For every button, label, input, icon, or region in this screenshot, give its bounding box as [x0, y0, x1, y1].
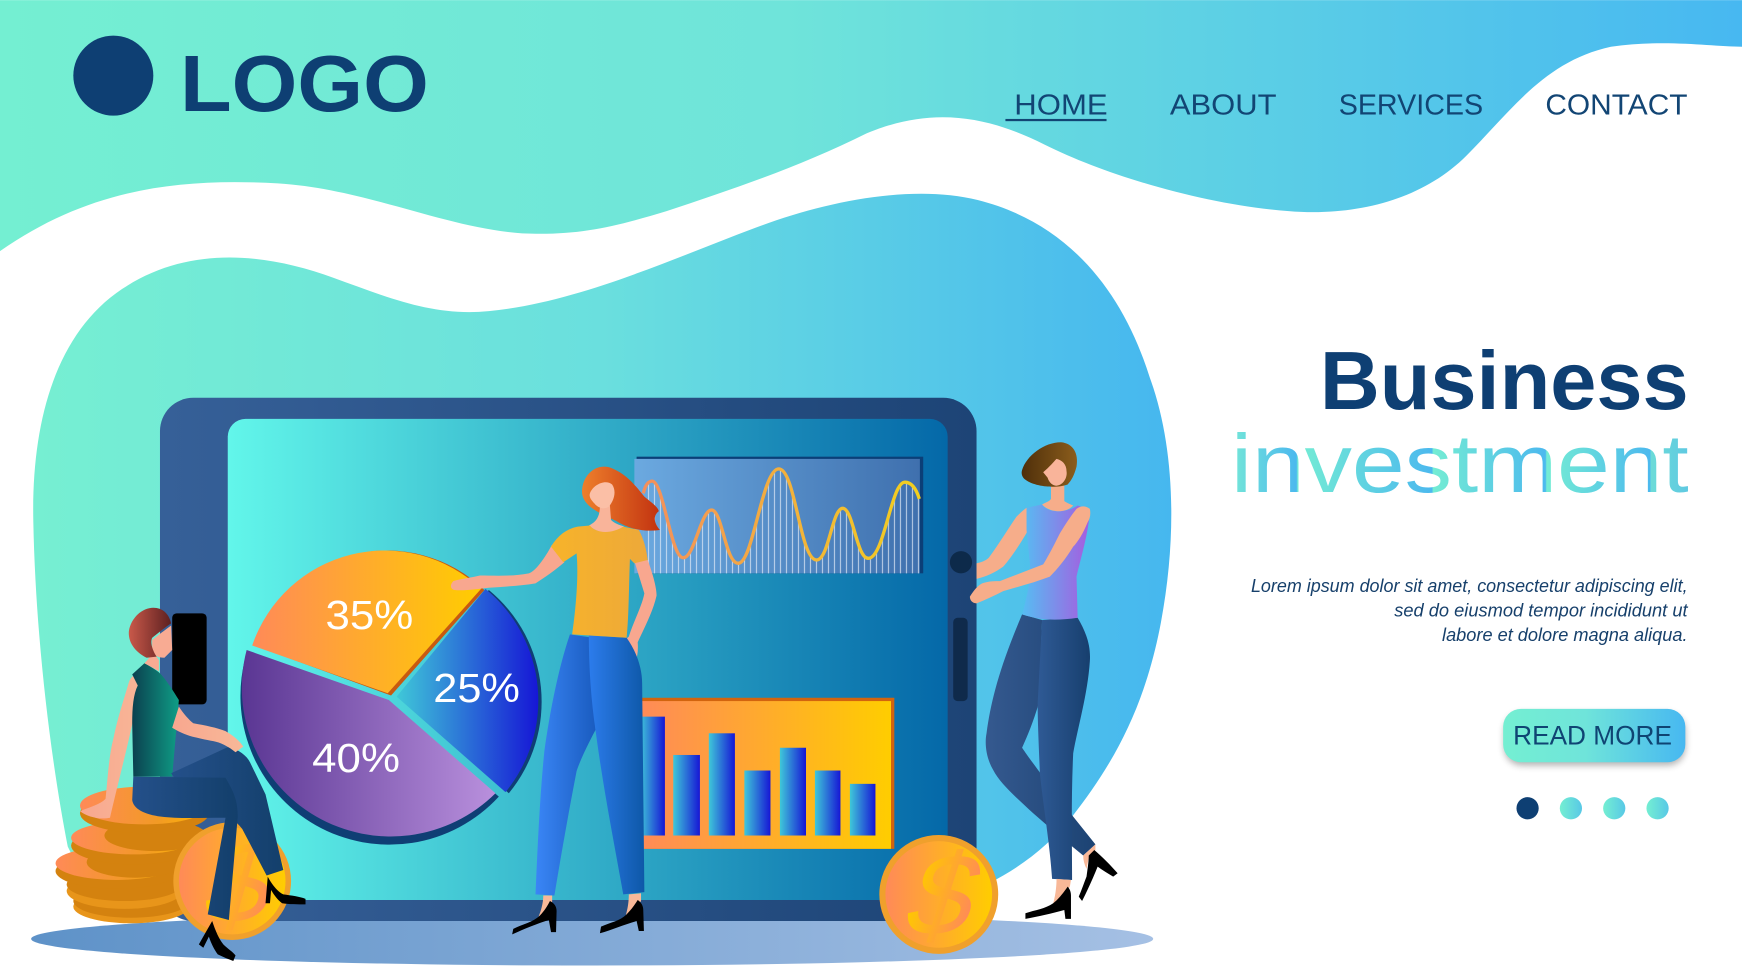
pie slice 35%: 35%	[326, 592, 413, 638]
heading	[1231, 336, 1689, 510]
hair	[129, 608, 171, 658]
read more button: READ MORE	[1513, 720, 1672, 750]
pie slice 40%	[240, 650, 499, 845]
pie slice 25%: 25%	[433, 665, 520, 711]
navigation menu: HOME	[1014, 89, 1108, 121]
hair	[582, 467, 660, 531]
logo	[73, 36, 429, 128]
large coin left: $	[192, 817, 293, 947]
coin stack	[56, 787, 209, 923]
pagination dots	[1516, 797, 1669, 819]
pie slice 40%: 40%	[312, 735, 400, 781]
paragraph text: labore et dolore magna aliqua.	[1442, 625, 1688, 646]
paragraph text	[1251, 576, 1688, 646]
ground shadow ellipse	[31, 912, 1153, 965]
face	[590, 482, 615, 508]
pie chart	[240, 550, 542, 845]
line chart panel	[634, 457, 923, 573]
back arm	[977, 508, 1028, 579]
back leg	[986, 614, 1095, 856]
navigation menu: CONTACT	[1545, 89, 1688, 121]
navigation menu: ABOUT	[1170, 89, 1277, 121]
raised knee leg	[171, 747, 283, 876]
front arm	[970, 506, 1090, 603]
pointing arm	[451, 544, 564, 590]
background blob: illustration	[33, 194, 1171, 889]
neck and face	[144, 626, 172, 671]
neck	[589, 506, 624, 533]
tablet camera	[950, 551, 972, 573]
standing woman right	[970, 442, 1118, 919]
shoe left	[512, 901, 557, 934]
front leg	[132, 777, 238, 920]
read more button	[1503, 709, 1685, 766]
yellow shirt	[551, 526, 648, 638]
neck	[1042, 483, 1073, 511]
large coin right: $	[892, 831, 998, 960]
front leg	[1038, 618, 1090, 880]
pie slice 35%	[252, 550, 484, 696]
shoe right	[266, 877, 306, 904]
heading: Business	[1320, 336, 1689, 427]
tank top	[1022, 504, 1090, 620]
hip arm	[615, 560, 657, 674]
bar chart panel	[639, 698, 894, 849]
tablet device	[160, 398, 977, 921]
pie slice 25%	[397, 589, 542, 793]
green top	[132, 663, 179, 777]
logo: LOGO	[180, 39, 429, 128]
seated woman	[80, 608, 306, 961]
tablet screen	[228, 419, 948, 900]
standing woman centre	[451, 467, 660, 934]
back arm	[80, 673, 150, 818]
forearm on knee	[172, 707, 243, 752]
jeans left leg	[535, 634, 595, 896]
heading: investment	[1231, 419, 1689, 510]
shoe right	[600, 900, 644, 933]
paragraph text: sed do eiusmod tempor incididunt ut	[1394, 601, 1688, 622]
hair	[1022, 442, 1077, 487]
shoe back	[1079, 850, 1118, 901]
face	[1043, 459, 1067, 486]
navigation menu: SERVICES	[1339, 89, 1483, 121]
shoe front	[1025, 887, 1071, 919]
background wave: header	[0, 0, 1742, 251]
tablet side button	[953, 618, 968, 701]
paragraph text: Lorem ipsum dolor sit amet, consectetur adipiscing elit,	[1251, 576, 1688, 597]
navigation menu	[1005, 89, 1688, 121]
tablet black speaker	[172, 613, 207, 704]
ankles	[538, 893, 641, 919]
ankles	[1053, 844, 1095, 903]
jeans right leg	[589, 636, 644, 894]
shoe left	[199, 921, 236, 961]
